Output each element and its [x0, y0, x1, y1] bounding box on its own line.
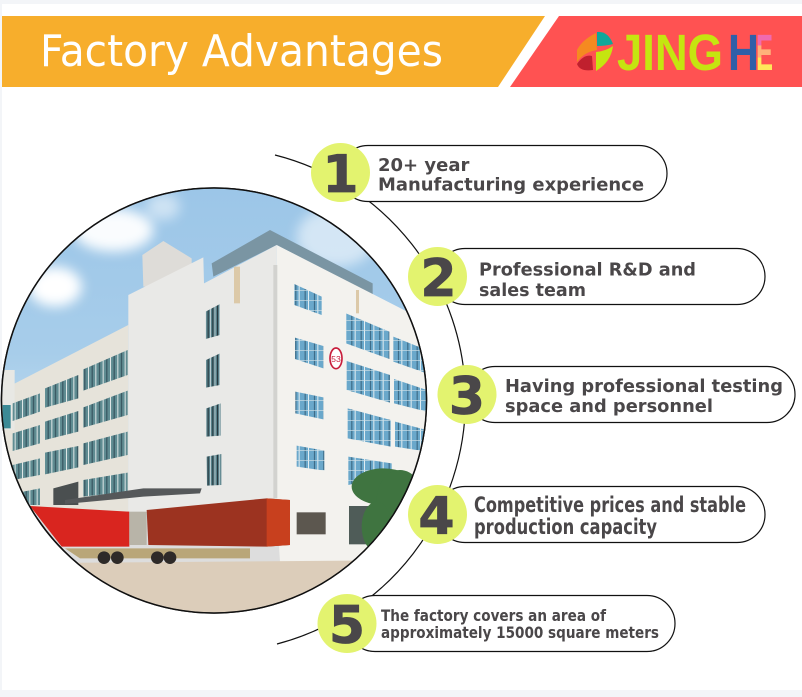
- logo wordmark JING: JING: [617, 24, 723, 81]
- text 4: production capacity: [474, 515, 657, 539]
- banner: title bar: [2, 16, 545, 87]
- ground floor windows: [297, 512, 326, 534]
- pill 5: [347, 596, 675, 652]
- text 5: approximately 15000 square meters: [381, 623, 659, 642]
- item 1: [311, 143, 667, 205]
- red container: [30, 506, 129, 547]
- badge 5: [318, 594, 376, 653]
- header banner: [2, 16, 802, 87]
- title: Factory Advantages: [40, 26, 443, 77]
- text 2: Professional R&D and: [479, 260, 696, 280]
- number 3: 3: [449, 367, 485, 427]
- number 2: 2: [420, 249, 457, 309]
- logo: [577, 24, 773, 81]
- ground: [78, 560, 352, 612]
- brown container: [147, 498, 290, 547]
- text 5: The factory covers an area of: [381, 606, 607, 625]
- tree: [352, 468, 412, 546]
- canopy: [65, 488, 202, 504]
- right wall: [277, 245, 430, 563]
- text 2: sales team: [479, 280, 586, 301]
- badge 4: [408, 485, 467, 544]
- large arc connector: [275, 155, 465, 644]
- wall stain: [234, 267, 240, 303]
- rooftop windows: [212, 230, 373, 295]
- factory photo: [0, 187, 430, 620]
- logo wordmark H: H: [728, 24, 759, 81]
- badge 1: [311, 143, 370, 202]
- wheels: [98, 551, 176, 564]
- main wall front: [128, 245, 277, 513]
- dark ground floor bay: [53, 482, 78, 505]
- pill 4: [437, 486, 765, 542]
- number 4: 4: [418, 487, 455, 547]
- sky: [0, 187, 430, 520]
- trailer chassis: [65, 548, 250, 558]
- icon: logo swirl: [577, 32, 613, 71]
- front wall windows: [206, 304, 221, 486]
- badge 2: [408, 247, 467, 306]
- far building: [3, 370, 15, 430]
- rooftop box: [142, 241, 192, 287]
- left wing: [0, 325, 128, 513]
- pill 1: [340, 146, 667, 202]
- speed-limit sign: 53: [331, 354, 341, 364]
- number 5: 5: [329, 596, 365, 656]
- right wall windows: [294, 284, 427, 485]
- text 1: Manufacturing experience: [378, 174, 644, 196]
- pill 2: [437, 248, 765, 304]
- badge 3: [438, 365, 496, 424]
- text 3: space and personnel: [505, 396, 713, 417]
- text 1: 20+ year: [378, 155, 469, 176]
- pill 3: [467, 366, 795, 422]
- text 3: Having professional testing: [505, 376, 783, 397]
- number 1: 1: [322, 145, 359, 205]
- speed-limit sign: [330, 348, 342, 369]
- text: E: [756, 24, 773, 81]
- clouds: [28, 193, 377, 307]
- gap frame: [129, 512, 147, 545]
- item 3: [438, 365, 795, 427]
- item 5: [318, 594, 675, 656]
- item 2: [408, 247, 765, 309]
- left wing windows: [13, 350, 128, 505]
- item 4: [408, 485, 765, 547]
- banner: logo bar: [510, 16, 802, 87]
